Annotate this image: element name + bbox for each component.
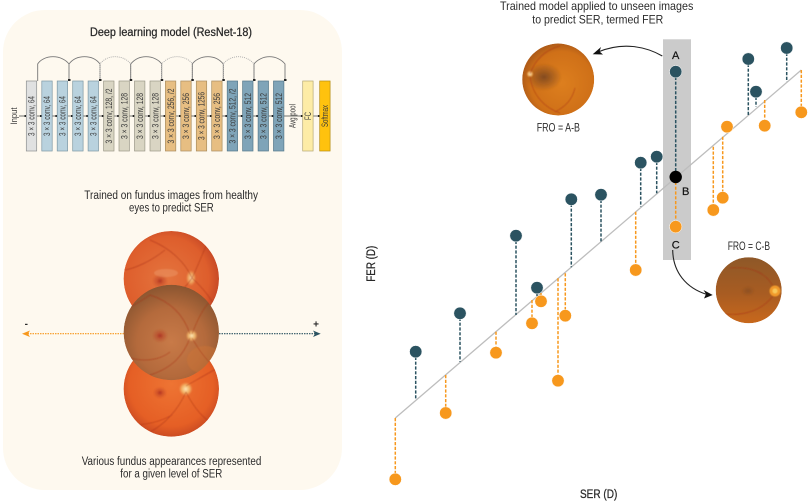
block labels	[27, 88, 330, 144]
network blocks	[26, 81, 330, 151]
block labels: Avg pool	[288, 104, 298, 128]
block labels: 3 × 3 conv, 128	[135, 93, 145, 139]
axis label: SER: SER (D)	[580, 489, 617, 501]
block labels: Softmax	[320, 105, 330, 127]
column labels A B C: B	[682, 186, 689, 198]
arrow: C to fundus	[673, 250, 713, 298]
panel: deep learning model	[3, 10, 342, 490]
block labels: FC	[303, 112, 313, 120]
arrow: positive SER direction: +	[313, 320, 319, 330]
block labels: 3 × 3 conv, 64	[58, 96, 68, 136]
block labels: 3 × 3 conv, 64	[42, 96, 52, 136]
heading: deep learning model: Deep learning model (ResNet-18)	[90, 27, 252, 39]
block labels: 3 × 3 conv, 128, /2	[104, 88, 114, 144]
heading: trained model applied	[500, 0, 693, 26]
block labels: 3 × 3 conv, 512, /2	[228, 88, 238, 144]
highlighted column	[663, 39, 691, 260]
block labels: 3 × 3 conv, 512	[243, 93, 253, 139]
arrow: negative SER direction: -	[25, 319, 28, 330]
column labels A B C	[672, 50, 689, 252]
column labels A B C: A	[672, 50, 680, 62]
block labels: 3 × 3 conv, 64	[27, 96, 37, 136]
block labels: 3 × 3 conv, 256, /2	[166, 88, 176, 144]
block labels: 3 × 3 conv, 512	[258, 93, 268, 139]
block labels: 3 × 3 conv, 128	[150, 93, 160, 139]
block labels: 3 × 3 conv, 256	[181, 93, 191, 139]
block labels: 3 × 3 conv, 64	[88, 96, 98, 136]
scatter: negative residual droplines and points	[389, 70, 808, 486]
skip connection arcs	[38, 57, 287, 81]
block labels: 3 × 3 conv, 128	[119, 93, 129, 139]
fundus image: bottom	[124, 360, 219, 437]
regression line	[395, 70, 801, 418]
point B	[670, 171, 682, 183]
fundus image: middle	[124, 285, 223, 380]
flow line between blocks	[19, 115, 320, 117]
column labels A B C: C	[672, 240, 680, 252]
block labels: 3 × 3 conv, 256	[212, 93, 222, 139]
fundus image: top	[124, 231, 219, 306]
input label: Input	[9, 107, 19, 124]
heading: trained model applied: to predict SER, termed FER	[532, 12, 664, 26]
axis label: FER: FER (D)	[366, 246, 378, 282]
arrow: A to fundus	[593, 46, 662, 56]
label: FRO C-B: FRO = C-B	[728, 241, 770, 253]
text: various fundus appearances: for a given level of SER	[120, 468, 222, 480]
text: trained on fundus images	[84, 190, 258, 215]
fundus image: low FRO	[716, 257, 782, 323]
fundus image: high FRO	[522, 44, 594, 116]
block labels: 3 × 3 conv, 512	[274, 93, 284, 139]
block labels: 3 × 3 conv, 64	[73, 96, 83, 136]
block labels: 3 × 3 conv, 1256	[197, 92, 207, 140]
text: trained on fundus images: Trained on fundus images from healthy	[84, 190, 258, 202]
label: FRO A-B: FRO = A-B	[537, 123, 580, 135]
text: various fundus appearances: Various fundus appearances represented	[82, 456, 261, 468]
arrow: negative SER direction	[22, 319, 124, 337]
text: various fundus appearances	[82, 456, 261, 480]
arrow: positive SER direction	[219, 320, 321, 337]
scatter: positive residual droplines and points	[410, 42, 793, 400]
text: trained on fundus images: eyes to predict SER	[129, 203, 214, 215]
